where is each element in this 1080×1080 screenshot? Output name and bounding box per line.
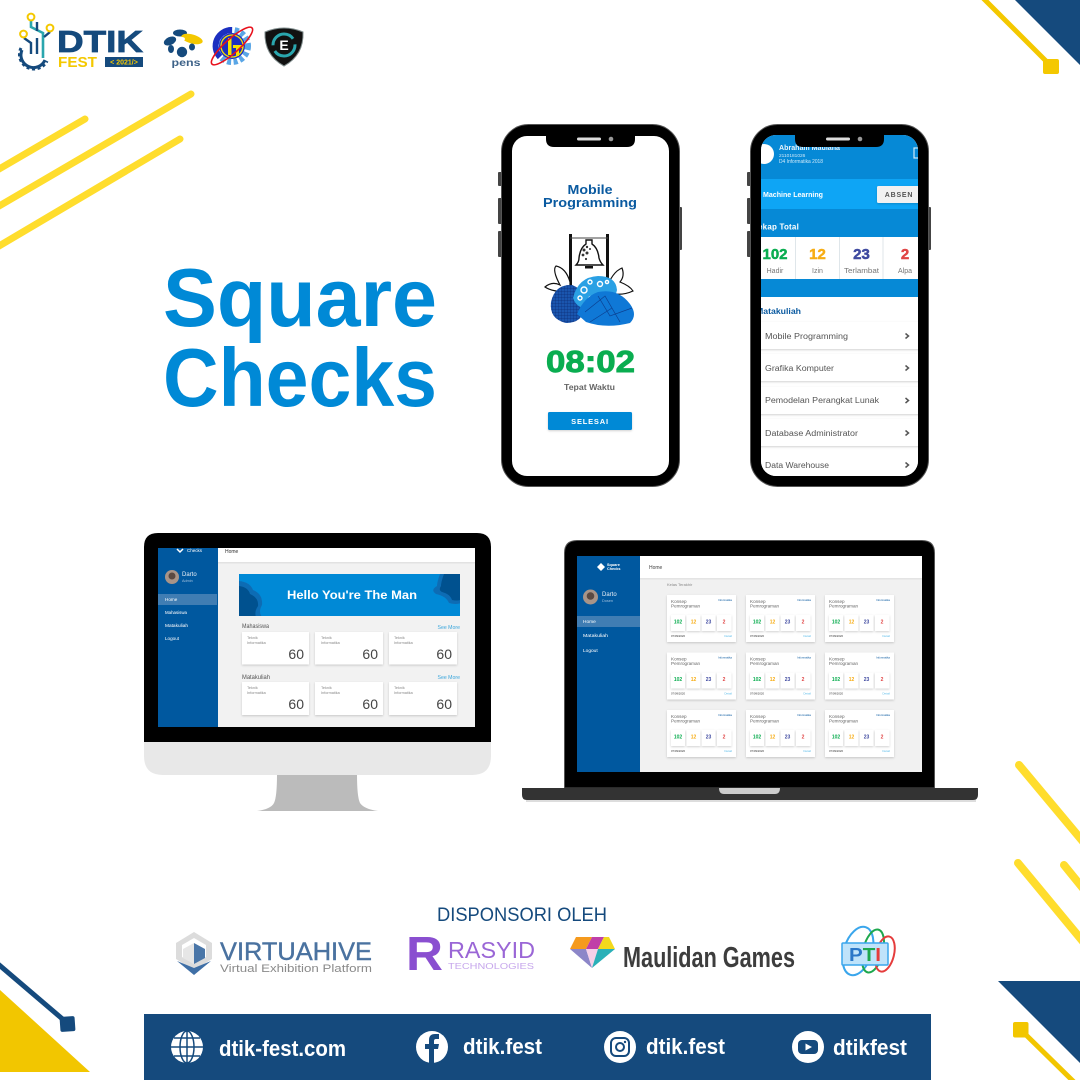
title: Square Checks [163, 251, 437, 424]
class card: 2 [802, 677, 805, 683]
icon: diamond [570, 937, 615, 968]
section: mahasiswa: Teknik [321, 636, 332, 640]
section: mahasiswa: See More [438, 625, 460, 631]
class card: Detail [882, 634, 890, 638]
icon: facebook [416, 1031, 448, 1063]
sponsor: Maulidan Games [570, 937, 795, 974]
icon: globe [171, 1031, 203, 1063]
class card: 23 [864, 620, 869, 626]
logo: IT gear [207, 23, 257, 69]
class card: 2 [881, 620, 884, 626]
course list: Mobile Programming [765, 332, 848, 341]
class card: 23 [706, 620, 711, 626]
class card: Detail [803, 634, 811, 638]
sidebar: Matakuliah [583, 633, 608, 639]
profile header: D4 Informatika 2018 [779, 159, 823, 165]
class card: 23 [864, 677, 869, 683]
logo: E shield [265, 28, 303, 66]
class card: Detail [882, 692, 890, 696]
admin screen: Home [225, 549, 239, 555]
logo wordmark: DTIK [57, 24, 144, 59]
class card: 23 [785, 677, 790, 683]
class card: 102 [753, 677, 761, 683]
class card: Detail [803, 692, 811, 696]
sidebar: Dosen [602, 599, 613, 603]
title: Square Checks: Checks [163, 331, 437, 424]
class card: 102 [832, 620, 840, 626]
recap panel: 12 [809, 246, 826, 263]
class card: 07/09/2020 [671, 749, 685, 753]
top-right corner decoration [983, 0, 1080, 74]
profile header: Abraham Maulana [779, 145, 840, 152]
class card [825, 652, 894, 700]
class card: Konsep [829, 656, 845, 662]
laptop base [522, 788, 978, 802]
section: mahasiswa: Informatika [321, 641, 341, 645]
recap panel: 2 [901, 246, 909, 263]
class card: 12 [849, 734, 854, 740]
section: mahasiswa: Teknik [394, 636, 405, 640]
section: matakuliah: Informatika [394, 691, 414, 695]
logo: PENS [162, 30, 204, 69]
sidebar: Square [607, 563, 620, 567]
icon: instagram [604, 1031, 636, 1063]
class card: 2 [723, 620, 726, 626]
sidebar: Admin [182, 579, 193, 583]
class card [746, 710, 815, 757]
sidebar: Checks [607, 567, 621, 571]
class card: 2 [723, 734, 726, 740]
section: matakuliah: Informatika [321, 691, 341, 695]
title: Square Checks: Square [163, 251, 437, 344]
phone: attendance result [498, 124, 682, 486]
sponsor: Rasyid Technologies: R [406, 928, 443, 981]
class card: Konsep [750, 656, 766, 662]
logo wordmark: FEST [58, 54, 97, 71]
sponsor: Rasyid Technologies: RASYID [448, 937, 535, 963]
class card: Informatika [718, 713, 732, 717]
section: matakuliah: 60 [362, 696, 378, 712]
class card: Konsep [671, 714, 687, 719]
class card: 07/09/2020 [750, 749, 764, 753]
sidebar: Logout [165, 636, 180, 641]
app screen [761, 135, 918, 476]
illustration: bell and bushes [545, 234, 634, 326]
class card: Informatika [797, 713, 811, 717]
class card: 2 [723, 677, 726, 683]
section: mahasiswa: Informatika [247, 641, 267, 645]
course list [755, 307, 925, 479]
class card: Pemrograman [750, 661, 780, 666]
class card: 07/09/2020 [829, 749, 843, 753]
class card: Informatika [876, 713, 890, 717]
monitor stand [257, 774, 378, 811]
sponsor: Virtuahive: Virtual Exhibition Platform [220, 963, 372, 975]
recap panel: Izin [812, 268, 823, 275]
class card: 2 [881, 734, 884, 740]
class card: 102 [753, 620, 761, 626]
class card: 07/09/2020 [671, 692, 685, 696]
monitor: admin dashboard [144, 533, 491, 811]
class card: 07/09/2020 [829, 692, 843, 696]
section: matakuliah: 60 [288, 696, 304, 712]
sidebar: Darto [602, 592, 617, 598]
course list: Pemodelan Perangkat Lunak [765, 396, 880, 405]
hero banner: Hello You're The Man [287, 588, 417, 602]
sponsor: Rasyid Technologies: TECHNOLOGIES [448, 961, 534, 971]
youtube handle: dtikfest [833, 1035, 908, 1060]
sponsor: Virtuahive [176, 932, 372, 975]
sidebar: Home [165, 597, 178, 602]
class card: Konsep [750, 599, 766, 604]
sidebar [158, 548, 218, 727]
bottom-left corner decoration [0, 964, 90, 1072]
current class strip: Machine Learning [763, 190, 823, 199]
sponsor: Virtuahive: VIRTUAHIVE [220, 938, 372, 966]
right yellow stripes [1018, 765, 1080, 950]
class card: Pemrograman [750, 604, 780, 608]
hero banner [239, 574, 461, 617]
class card: 102 [832, 734, 840, 740]
year badge: < 2021/> [110, 60, 138, 66]
website: dtik-fest.com [219, 1036, 346, 1061]
class card: Detail [724, 692, 732, 696]
section: matakuliah: Matakuliah [242, 674, 270, 681]
section: matakuliah [242, 674, 460, 715]
class card: 102 [674, 734, 682, 740]
button: selesai: SELESAI [571, 417, 609, 426]
recap panel: Alpa [898, 268, 912, 275]
sponsor: PTI: PTI [849, 945, 881, 965]
section: mahasiswa: Teknik [247, 636, 258, 640]
class card: Detail [882, 749, 890, 753]
heading: course name: Programming [543, 195, 637, 210]
class card: 102 [674, 677, 682, 683]
class card [667, 652, 736, 700]
sidebar: Matakuliah [165, 623, 188, 628]
class card: 12 [691, 620, 696, 626]
phone frame [747, 124, 931, 486]
recap panel: 102 [762, 246, 788, 263]
phone frame [498, 124, 682, 486]
class card: Konsep [829, 599, 845, 604]
section: matakuliah: Teknik [321, 686, 332, 690]
class card: Informatika [797, 598, 811, 602]
logo: PENS: pens [172, 58, 201, 69]
current class strip: ABSEN [885, 192, 913, 199]
monitor chin [144, 742, 491, 775]
button: selesai [548, 412, 632, 430]
icon: youtube [792, 1031, 824, 1063]
sponsor: Maulidan Games: Maulidan Games [623, 942, 795, 974]
class card [746, 595, 815, 642]
class card: 23 [706, 734, 711, 740]
bottom-right corner decoration [998, 981, 1080, 1080]
class card: 12 [770, 677, 775, 683]
heading: course name [543, 182, 637, 210]
instagram handle: dtik.fest [646, 1034, 726, 1059]
class card: 07/09/2020 [750, 692, 764, 696]
section: mahasiswa: Informatika [394, 641, 414, 645]
status label: Tepat Waktu [564, 382, 615, 392]
course list: Grafika Komputer [765, 364, 834, 373]
class card [746, 652, 815, 700]
recap panel: Terlambat [844, 268, 879, 275]
logo: DTIK Fest [19, 14, 144, 71]
section: matakuliah: Informatika [247, 691, 267, 695]
class card: 12 [691, 677, 696, 683]
course list: Matakuliah [756, 307, 801, 316]
monitor bezel [144, 533, 491, 742]
class card: Pemrograman [671, 604, 701, 608]
class card: 07/09/2020 [829, 634, 843, 638]
admin screen [158, 548, 475, 727]
class card: 102 [674, 620, 682, 626]
class card: Pemrograman [829, 661, 859, 666]
course list: Data Warehouse [765, 461, 830, 470]
facebook handle: dtik.fest [463, 1034, 543, 1059]
class card: Pemrograman [750, 718, 780, 724]
icon: circuit gear [19, 14, 53, 69]
class card: Konsep [671, 599, 687, 604]
course list: Database Administrator [765, 429, 858, 438]
class card: Konsep [671, 656, 687, 662]
sidebar: Home [583, 619, 596, 625]
icon: hive cube [176, 932, 212, 975]
class card: Informatika [797, 656, 811, 660]
profile header: 2110181026 [779, 153, 806, 159]
class card: Konsep [829, 714, 845, 719]
current class strip [761, 179, 922, 209]
laptop screen: Home [649, 565, 663, 571]
logo: E shield: E [279, 37, 289, 53]
class card [667, 595, 736, 642]
class card: Informatika [876, 656, 890, 660]
class card: Detail [724, 634, 732, 638]
recap panel: Hadir [767, 268, 784, 275]
section: mahasiswa: Mahasiswa [242, 623, 269, 630]
section: mahasiswa: 60 [362, 646, 378, 662]
recap panel [752, 209, 925, 297]
class card [825, 595, 894, 642]
class card: 23 [706, 677, 711, 683]
class card: 12 [849, 620, 854, 626]
phone: dashboard [747, 124, 931, 486]
recap panel: 23 [853, 246, 870, 263]
sidebar: Darto [182, 572, 197, 578]
class card: Informatika [718, 656, 732, 660]
sidebar: Mahasiswa [165, 610, 187, 615]
logo wordmark [57, 24, 144, 71]
footer bar [144, 1014, 931, 1080]
section: mahasiswa: 60 [436, 646, 452, 662]
section: mahasiswa: 60 [288, 646, 304, 662]
sidebar: Checks [187, 548, 203, 553]
section: matakuliah: 60 [436, 696, 452, 712]
section: matakuliah: Teknik [247, 686, 258, 690]
class card: 23 [785, 734, 790, 740]
class card: Detail [803, 749, 811, 753]
class card: 2 [802, 620, 805, 626]
class card: Informatika [876, 598, 890, 602]
class card: Pemrograman [829, 604, 859, 608]
heading: course name: Mobile [568, 182, 612, 197]
section: matakuliah: See More [438, 675, 460, 681]
top-left yellow stripes [0, 94, 191, 249]
class card: Pemrograman [829, 718, 859, 724]
profile header [754, 135, 920, 179]
class card: 12 [770, 620, 775, 626]
time value: 08:02 [546, 344, 635, 379]
laptop: lecturer dashboard [522, 540, 978, 802]
laptop screen [577, 556, 922, 772]
class card: 12 [691, 734, 696, 740]
phone notch [795, 134, 884, 147]
class card: Informatika [718, 598, 732, 602]
class card: Pemrograman [671, 661, 701, 666]
class card [825, 710, 894, 757]
laptop lid [564, 540, 934, 788]
section: mahasiswa [242, 623, 460, 664]
class card: 12 [770, 734, 775, 740]
class card: 07/09/2020 [750, 634, 764, 638]
class card: 12 [849, 677, 854, 683]
class card: 07/09/2020 [671, 634, 685, 638]
sidebar [577, 556, 640, 772]
class card [667, 710, 736, 757]
sponsor: Rasyid Technologies [406, 928, 535, 981]
class card: 23 [864, 734, 869, 740]
class card: Detail [724, 749, 732, 753]
section: matakuliah: Teknik [394, 686, 405, 690]
class card: Pemrograman [671, 718, 701, 724]
class card: 23 [785, 620, 790, 626]
heading: sponsors: DISPONSORI OLEH [437, 905, 607, 926]
class card: 102 [832, 677, 840, 683]
sidebar: Logout [583, 648, 598, 654]
laptop screen: Kelas Terakhir [667, 582, 693, 587]
class card: 2 [881, 677, 884, 683]
class card: Konsep [750, 714, 766, 719]
class card: 2 [802, 734, 805, 740]
sponsor: PTI [837, 923, 898, 979]
class card: 102 [753, 734, 761, 740]
recap panel: Rekap Total [752, 222, 799, 232]
